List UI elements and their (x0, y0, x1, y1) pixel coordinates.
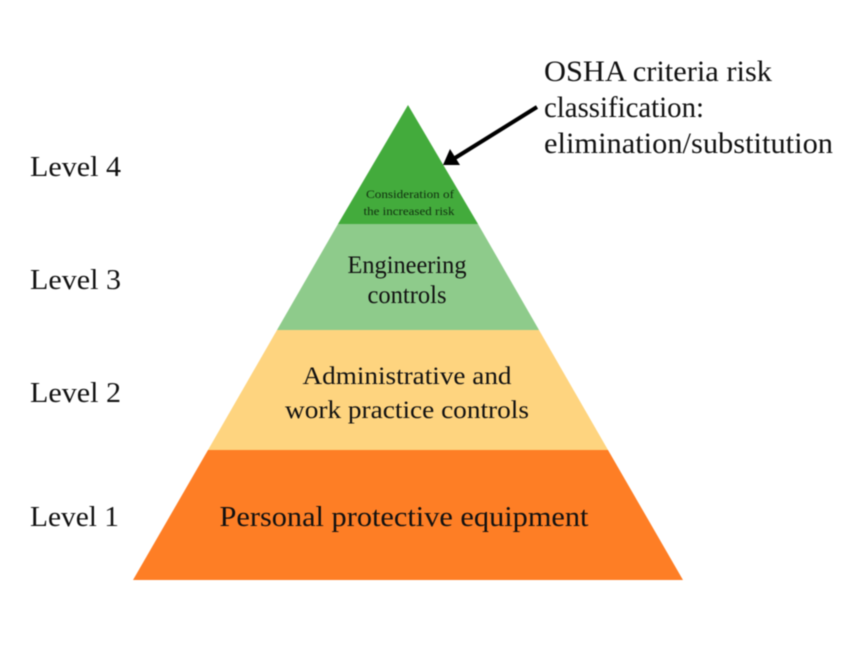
level 4 tier: elimination: the increased risk (364, 204, 454, 218)
level labels: Level 2 (30, 378, 121, 409)
level 1 tier: personal protective equipment (133, 450, 683, 580)
level 3 tier: engineering controls: controls (368, 282, 446, 309)
callout: OSHA criteria (544, 55, 833, 160)
level 3 tier: engineering controls: Engineering (348, 252, 467, 279)
level labels: Level 1 (30, 502, 119, 533)
level 4 tier: elimination: Consideration of (366, 187, 454, 201)
level labels: Level 3 (30, 265, 121, 296)
callout: OSHA criteria: classification: (544, 91, 704, 124)
level 3 tier: engineering controls (277, 224, 539, 330)
callout: OSHA criteria: OSHA criteria risk (544, 55, 772, 88)
level 2 tier: administrative controls: work practice controls (285, 397, 529, 424)
level labels: Level 4 (30, 152, 121, 183)
level 2 tier: administrative controls: Administrative and (302, 363, 512, 390)
level 2 tier: administrative controls (208, 330, 608, 450)
level labels (30, 152, 121, 533)
level 4 tier: elimination (338, 105, 478, 224)
level 1 tier: personal protective equipment: Personal protective equipment (220, 502, 589, 533)
callout: OSHA criteria: elimination/substitution (544, 127, 833, 160)
arrow: callout to top tier (443, 107, 537, 165)
